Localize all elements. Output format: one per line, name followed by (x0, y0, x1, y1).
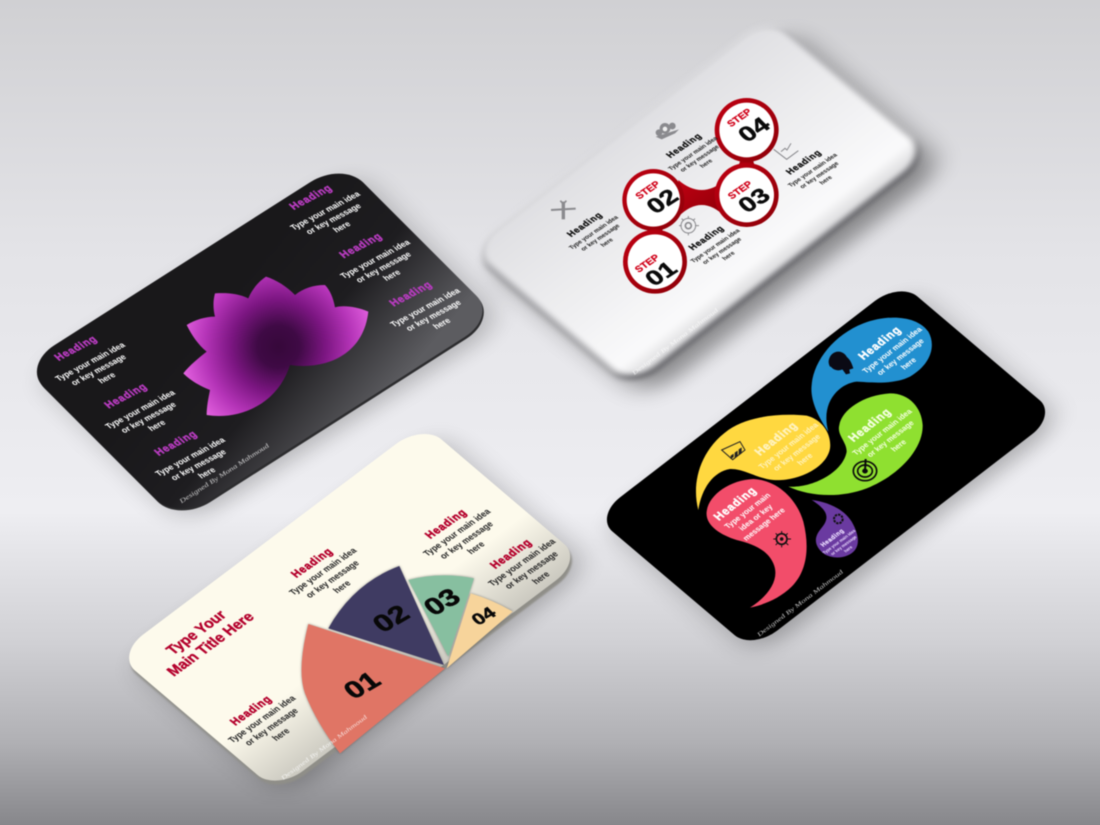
text block: step 1 label: Type your main idea (568, 214, 621, 251)
text block: step 2 label: Heading (664, 131, 704, 159)
step connector (635, 147, 767, 247)
number 01: 01 (338, 666, 386, 704)
icon: gear (679, 216, 699, 235)
watermark: Designed By Mona Mahmoud (754, 568, 845, 638)
step 02 (622, 169, 684, 231)
text block: right 2: here (380, 267, 403, 283)
text block: left 2: Heading (102, 381, 150, 411)
title: Type Your (163, 608, 230, 658)
text block: green: Heading (846, 406, 895, 444)
text block: purple: or key message (829, 534, 858, 556)
text block: left 2: here (145, 418, 168, 433)
text block: step 3 label: Type your main idea (689, 228, 742, 264)
yellow drop (696, 415, 830, 510)
text block: slice 04 label: Heading (488, 537, 535, 571)
panel: pie card (116, 424, 593, 798)
step 02: STEP (634, 179, 663, 202)
text block: step 3 label: Heading (686, 224, 727, 252)
text block: right 2: Type your main idea (338, 237, 413, 280)
text block: right 3: Heading (387, 279, 435, 309)
text block: left 2: Type your main idea (103, 388, 178, 431)
text block: slice 04 label: Type your main idea (486, 537, 558, 588)
green drop (788, 393, 923, 495)
text block: slice 02 label: Type your main idea (287, 546, 359, 597)
text block: step 4 label: or key message (798, 160, 841, 190)
text block: right 1: or key message (303, 201, 364, 236)
text block: step 3 label: here (721, 250, 737, 262)
lotus flower (183, 277, 368, 416)
watermark: Designed By Mona Mahmoud (629, 307, 720, 377)
text block: purple: Type your main idea (821, 528, 857, 555)
text block: green (839, 398, 931, 470)
text block: blue: here (899, 355, 919, 371)
step 01 (623, 230, 687, 294)
text block: left 3: here (195, 465, 218, 480)
step 04: 04 (733, 113, 776, 147)
text block: slice 04 label: here (530, 569, 552, 586)
text block: pink: Heading (712, 485, 760, 523)
watermark: Designed By Mona Mahmoud (278, 714, 369, 782)
text block: right 3: Type your main idea (388, 286, 463, 329)
text block: slice 03 label: Heading (423, 507, 470, 541)
text block: step 1 label: here (599, 237, 616, 248)
purple drop (812, 500, 858, 557)
text block: slice 02 label: Heading (289, 546, 336, 580)
step 03 (715, 163, 779, 227)
panel: steps card (469, 16, 948, 400)
text block: slice 03 label: Type your main idea (421, 507, 493, 558)
text block: left 1: or key message (68, 352, 129, 387)
pie slice 04 (447, 593, 513, 668)
panel: lotus card (22, 162, 507, 527)
text block: pink: Type your main (722, 491, 773, 530)
text block: pink: idea or key (737, 502, 775, 532)
watermark: Designed By Mona Mahmoud (177, 442, 271, 505)
step 03: 03 (733, 184, 776, 218)
text block: slice 03 label: here (465, 539, 487, 556)
text block: green: or key message (865, 418, 917, 459)
panel: swirl card (595, 282, 1065, 657)
blue drop (811, 318, 932, 432)
text block: slice 03 label (410, 498, 512, 573)
step 04: STEP (725, 107, 755, 129)
text block: yellow: Type your main idea (757, 421, 821, 471)
text block: purple (815, 523, 866, 562)
text block: step 2 label: or key message (679, 144, 722, 173)
step 03: STEP (726, 179, 756, 202)
pink drop (707, 479, 807, 608)
text block: right 1: here (330, 219, 353, 234)
text block: yellow: Heading (753, 420, 801, 458)
icon: people (656, 123, 679, 139)
text block: yellow: here (795, 451, 815, 467)
text block: slice 01 label: or key message (242, 706, 300, 747)
text block: left 3 (138, 421, 244, 494)
text block: blue: Heading (856, 324, 905, 362)
text block: left 3: Type your main idea (153, 435, 228, 478)
text block: slice 01 label: Heading (228, 694, 275, 728)
text block: left 1 (38, 326, 144, 399)
text block: purple: Heading (819, 528, 846, 548)
number 03: 03 (418, 583, 466, 621)
text block: left 3: Heading (152, 429, 200, 458)
step 02: 02 (642, 185, 684, 219)
step 01: STEP (633, 252, 663, 275)
text block: step 4 label (775, 143, 853, 199)
text block: step 1 label: or key message (579, 223, 622, 252)
text block: step 4 label: Type your main idea (787, 152, 840, 189)
number 02: 02 (367, 600, 415, 637)
text block: slice 02 label: or key message (303, 558, 361, 600)
text block: blue (849, 316, 941, 388)
step 01: 01 (640, 257, 683, 291)
icon: growth chart (774, 143, 798, 159)
title: Main Title Here (164, 610, 258, 679)
text block: green: here (889, 437, 909, 453)
text block: right 1 (273, 175, 379, 248)
text block: slice 03 label: or key message (437, 519, 495, 561)
text block: blue: Type your main idea (860, 325, 925, 375)
text block: slice 04 label: or key message (502, 549, 560, 591)
pie shadow (302, 566, 513, 753)
number 04: 04 (467, 603, 500, 629)
text block: left 1: here (95, 370, 118, 385)
text block: right 2: or key message (353, 249, 414, 285)
text block: step 2 label: here (698, 158, 715, 169)
text block: right 3: or key message (403, 298, 464, 333)
text block: left 2 (88, 374, 194, 447)
text block: step 2 label: Type your main idea (667, 135, 720, 172)
text block: right 1: Heading (287, 183, 335, 212)
text block: slice 01 label: here (270, 726, 292, 743)
text block: step 1 label: Heading (564, 210, 605, 238)
text block: right 3: here (430, 316, 453, 331)
text block: left 3: or key message (168, 447, 229, 482)
text block: step 3 label (678, 219, 756, 274)
icon: tools (551, 201, 576, 219)
text block: pink: message here (741, 506, 788, 542)
text block: yellow (745, 411, 837, 484)
icon: aperture (834, 515, 843, 523)
text block: slice 01 label (215, 685, 317, 760)
text block: slice 01 label: Type your main idea (226, 693, 298, 745)
icon: gear bulb (773, 531, 791, 547)
pie slice 01 (302, 624, 445, 753)
text block: pink (711, 482, 789, 544)
icon: bar chart (722, 442, 745, 460)
text block: step 4 label: here (818, 174, 835, 186)
text block: right 2 (323, 223, 429, 296)
text block: purple: here (843, 544, 854, 553)
text block: slice 02 label: here (331, 578, 353, 595)
pie slice 02 (328, 566, 444, 665)
text block: slice 02 label (276, 537, 378, 612)
text block: step 4 label: Heading (783, 148, 824, 176)
text block: right 2: Heading (337, 231, 385, 261)
text block: step 1 label (556, 206, 634, 261)
text block: left 2: or key message (118, 400, 179, 435)
icon: head (829, 352, 853, 374)
text block: step 2 label (655, 127, 733, 182)
text block: right 3 (373, 272, 479, 345)
text block: blue: or key message (875, 336, 927, 377)
text block: yellow: or key message (771, 432, 823, 473)
text block: green: Type your main idea (850, 407, 915, 457)
step 04 (715, 98, 779, 162)
icon: target (853, 459, 877, 481)
text block: left 1: Type your main idea (53, 340, 128, 383)
text block: right 1: Type your main idea (288, 189, 363, 232)
pie slice 03 (408, 575, 474, 657)
text block: left 1: Heading (52, 334, 100, 363)
text block: slice 04 label (475, 528, 577, 603)
text block: step 3 label: or key message (701, 236, 744, 266)
